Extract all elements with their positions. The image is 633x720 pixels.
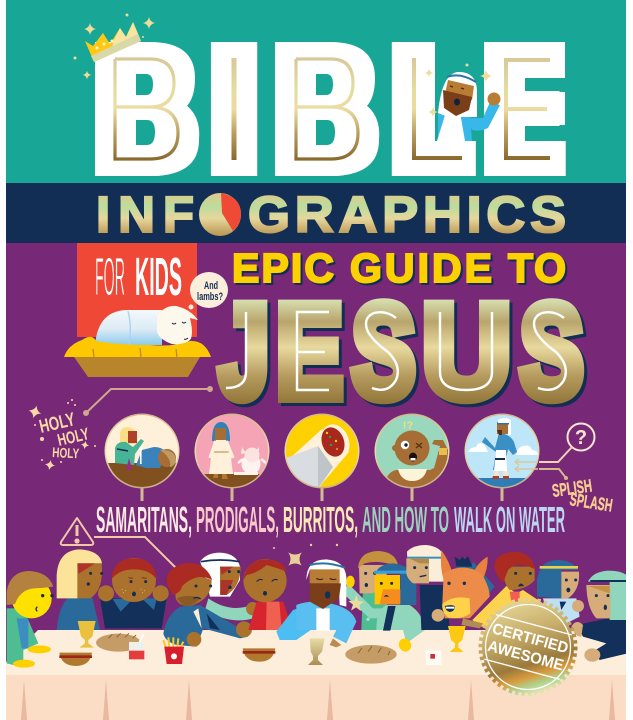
bread	[96, 634, 141, 652]
figure: jesus arm	[276, 608, 311, 640]
callout: question mark	[515, 424, 594, 480]
heading: INFOGRAPHICS	[96, 186, 566, 244]
heading: JESUS: S	[520, 279, 583, 425]
figures left	[7, 549, 292, 668]
badge: certified awesome	[481, 600, 575, 694]
gold inline strokes	[115, 58, 550, 160]
text: splish splash: SPLISH	[551, 476, 593, 501]
title: BIBLE: I	[207, 13, 261, 204]
decorative stars over the scene	[273, 544, 338, 573]
figure: far right apostle	[571, 571, 629, 662]
icon circle: baby: !?	[403, 420, 413, 432]
badge: certified awesome: AWESOME	[486, 638, 565, 674]
text: splish splash	[551, 476, 614, 516]
subtitle: SAMARITANS,	[96, 499, 192, 540]
figures right	[276, 545, 629, 665]
subtitle: BURRITOS,	[283, 499, 358, 540]
figure: apostle with white scarf behind	[200, 553, 241, 597]
heading: JESUS	[220, 278, 583, 425]
figure: boy with yellow face	[7, 571, 54, 668]
scene: last supper	[6, 545, 629, 720]
text: KIDS	[135, 247, 182, 307]
heading: JESUS: U	[423, 278, 510, 424]
subtitle: PRODIGALS,	[196, 499, 279, 540]
figure: tan-haired apostle with stars	[343, 551, 398, 630]
goblet center	[308, 638, 325, 665]
text: holy holy holy: HOLY	[56, 424, 92, 450]
heading: EPIC GUIDE TO	[232, 245, 566, 291]
heading: JESUS: E	[277, 280, 342, 424]
bread	[345, 645, 397, 664]
takeout box	[425, 650, 441, 665]
title: BIBLE: B	[272, 13, 379, 204]
panel: for kids	[77, 243, 197, 337]
title: BIBLE: L	[389, 13, 474, 204]
icon circle: walking on water	[464, 414, 541, 501]
icon: warning triangle with connector	[61, 518, 185, 577]
goblet	[78, 621, 96, 648]
figure: apostle with fists raised	[98, 558, 169, 628]
icon circle: burrito	[284, 414, 361, 501]
subtitle: AND HOW TO	[362, 499, 449, 540]
figure: jesus	[296, 559, 356, 647]
heading: JESUS: J	[220, 278, 269, 424]
subtitle	[96, 499, 565, 540]
heading: INFOGRAPHICS: O	[205, 186, 235, 243]
text: holy holy holy: HOLY	[52, 444, 80, 461]
title: BIBLE: E	[482, 13, 565, 205]
figure: apostle with blue headdress	[537, 560, 584, 623]
figure: apostle with yellow robe	[461, 552, 543, 628]
table items right	[308, 626, 466, 665]
goblet right	[448, 626, 466, 652]
callout: and lambs speech bubble: And	[204, 280, 218, 292]
icon circle: good samaritan	[104, 414, 180, 501]
callout: and lambs speech bubble: lambs?	[197, 291, 223, 303]
text: holy holy holy	[27, 399, 96, 471]
white inline strokes	[226, 312, 566, 390]
badge: certified awesome: CERTIFIED	[490, 620, 570, 657]
icon circle: prodigal son	[194, 414, 271, 501]
title: BIBLE	[92, 13, 565, 205]
fries	[163, 637, 183, 648]
title: BIBLE: B	[92, 13, 199, 204]
arrow: connector to JESUS	[84, 387, 212, 415]
heading: JESUS: S	[352, 279, 415, 425]
icon: cheering man in the L	[425, 64, 500, 141]
text: FOR KIDS: FOR	[95, 247, 125, 307]
heading: EPIC GUIDE TO: EPIC	[232, 245, 334, 291]
heading: INFOGRAPHICS: INF	[96, 186, 194, 243]
table items left	[59, 621, 275, 666]
icon: pie chart letter O	[199, 193, 241, 236]
callout: and lambs speech bubble	[188, 272, 228, 310]
callout: question mark: ?	[575, 427, 587, 449]
heading: INFOGRAPHICS: GRAPHICS	[248, 186, 566, 244]
cup	[129, 642, 144, 650]
figure: white scarf apostle	[406, 545, 450, 630]
heading: EPIC GUIDE TO: GUIDE	[350, 245, 492, 291]
figure: blonde apostle	[57, 549, 103, 630]
figure: worried apostle with blue robe	[163, 563, 259, 647]
figure: apostle with red robe	[243, 559, 292, 630]
figure: yellow-faced apostle	[374, 563, 425, 654]
heading: EPIC GUIDE TO: TO	[508, 245, 566, 291]
table cloth	[6, 630, 626, 720]
text: holy holy holy: HOLY	[37, 409, 77, 438]
figure: donkey	[441, 550, 495, 618]
bowls	[59, 653, 92, 666]
icon: crown	[74, 14, 155, 79]
icon circle: baby	[374, 414, 452, 501]
icon: lamb in manger	[64, 306, 211, 377]
